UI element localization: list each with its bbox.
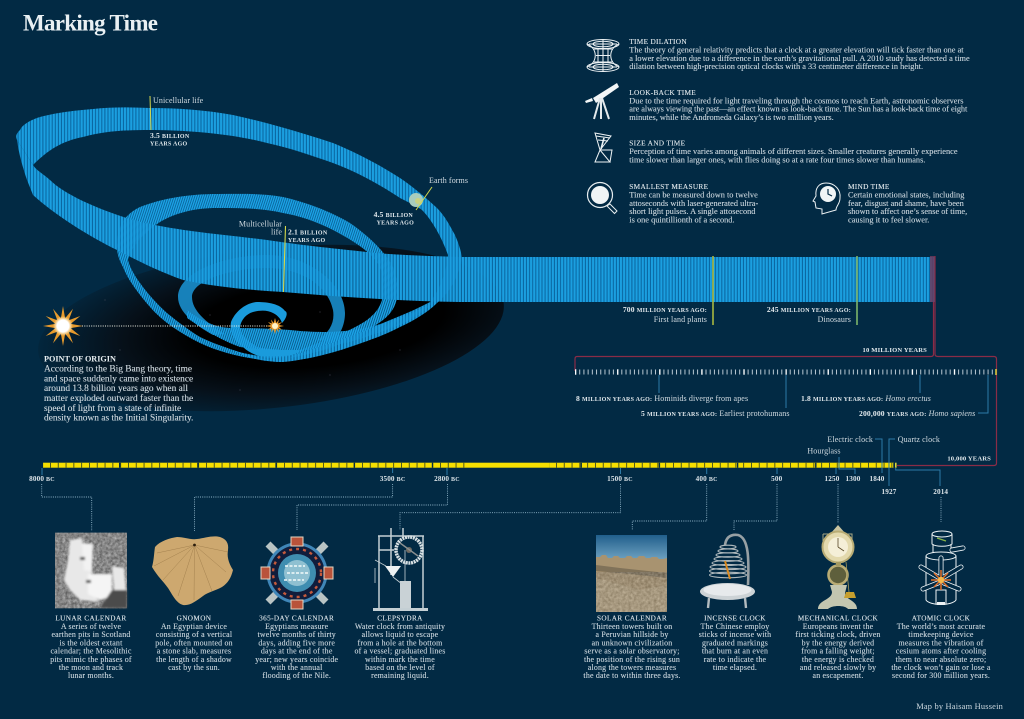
- text block: size and time: time slower than larger ones, with flies doing so at a rate four times slower than humans.: [629, 155, 925, 164]
- text: mechanical clock: and released slowly by: [800, 663, 876, 672]
- text block: mind time: Certain emotional states, including: [848, 191, 964, 200]
- text: atomic clock: ATOMIC CLOCK: [912, 615, 971, 623]
- icon: small origin burst: [266, 318, 284, 334]
- picture: clepsydra: [373, 528, 428, 611]
- marker: multicellular life: life: [271, 228, 282, 236]
- text: gnomon: [155, 615, 233, 672]
- date labels: 1300: [846, 475, 861, 483]
- text: gnomon: consisting of a vertical: [156, 630, 233, 639]
- clock labels above the bar: Electric clock: [827, 435, 873, 444]
- text: mechanical clock: Europeans invent the: [803, 622, 874, 631]
- text block: smallest measure: attoseconds with laser-generated ultra-: [629, 199, 758, 208]
- text block: point of origin: speed of light from a state of infinite: [44, 403, 181, 414]
- bracket: 10 million years zoom: [575, 256, 996, 466]
- text: lunar calendar: lunar months.: [68, 671, 114, 680]
- text: mechanical clock: [795, 615, 881, 680]
- text block: smallest measure: is one quintillionth of a second.: [629, 215, 735, 224]
- text: incense clock: sticks of incense with: [699, 630, 771, 639]
- text: lunar calendar: pits mimic the phases of: [50, 655, 132, 664]
- label: earliest protohumans: 5 MILLION YEARS AGO: Earliest protohumans: [641, 409, 790, 418]
- marker: unicellular life: YEARS AGO: [150, 142, 188, 148]
- date labels: 500: [771, 475, 783, 483]
- text block: mind time: causing it to feel slower.: [848, 215, 929, 224]
- marker: dinosaurs: 245 MILLION YEARS AGO:: [767, 305, 851, 314]
- text: solar calendar: SOLAR CALENDAR: [597, 615, 667, 623]
- date labels: 2800 BC: [434, 475, 460, 483]
- marker: unicellular life: [150, 96, 204, 148]
- text: atomic clock: [891, 615, 991, 680]
- icon: size and time: [595, 133, 612, 162]
- icon: magnifying glass: [588, 182, 617, 214]
- marker: unicellular life: Unicellular life: [153, 96, 204, 105]
- text: atomic clock: The world’s most accurate: [897, 622, 986, 631]
- picture: incense clock: [700, 535, 755, 608]
- text: lunar calendar: the moon and track: [59, 663, 123, 672]
- text: gnomon: pole, often mounted on: [155, 638, 233, 647]
- text: clepsydra: [354, 615, 446, 680]
- icon: time dilation: [587, 39, 619, 72]
- text block: mind time: [848, 182, 967, 224]
- text block: look-back time: minutes, while the Andromeda Galaxy’s is two million years.: [629, 113, 834, 122]
- label: hominids diverge from apes: 8 MILLION YEARS AGO: Hominids diverge from apes: [576, 394, 748, 403]
- text: atomic clock: the clock won’t gain or lose a: [891, 663, 991, 672]
- date labels: 1250: [825, 475, 840, 483]
- marker: multicellular life: 2.1 BILLION: [288, 228, 328, 236]
- text: lunar calendar: calendar; the Mesolithic: [50, 647, 132, 656]
- yellow 10,000-year timeline bar: [43, 463, 897, 468]
- text: clepsydra: Water clock from antiquity: [355, 622, 445, 631]
- spiral timeline: lower sweep: [187, 302, 433, 350]
- text block: mind time: shown to affect one’s sense of time,: [848, 207, 967, 216]
- date labels: 2014: [933, 488, 948, 496]
- text: clepsydra: remaining liquid.: [371, 671, 429, 680]
- icon: head with clock: [813, 183, 840, 214]
- text: clepsydra: from a hole at the bottom: [358, 638, 443, 647]
- text: mechanical clock: MECHANICAL CLOCK: [798, 615, 879, 623]
- marker: multicellular life: Multicellular: [239, 220, 282, 228]
- spiral timeline: third loop: [178, 255, 345, 342]
- text block: mind time: fear, disgust and shame, have been: [848, 199, 965, 208]
- label: homo erectus: [801, 375, 931, 403]
- picture: 365-day calendar: [261, 537, 333, 609]
- date labels: 3500 BC: [380, 475, 405, 483]
- date labels: 8000 BC: [29, 475, 55, 483]
- text: 365-day calendar: 365-DAY CALENDAR: [259, 615, 334, 623]
- text: incense clock: graduated markings: [702, 638, 768, 647]
- text block: look-back time: [629, 88, 968, 122]
- text: solar calendar: the date to within three days.: [583, 671, 681, 680]
- text: lunar calendar: earthen pits in Scotland: [51, 630, 131, 639]
- picture: mechanical clock: [818, 525, 857, 609]
- date labels: 1927: [882, 488, 897, 496]
- text: lunar calendar: is the oldest extant: [60, 638, 123, 647]
- text: incense clock: time elapsed.: [713, 663, 757, 672]
- title: Marking Time: [23, 10, 158, 36]
- text: solar calendar: an unknown civilization: [592, 638, 672, 647]
- marker: earth forms: [374, 176, 468, 226]
- text: 365-day calendar: with the annual: [271, 663, 323, 672]
- marker: earth forms: YEARS AGO: [377, 220, 414, 226]
- text: solar calendar: the position of the rising sun: [584, 655, 680, 664]
- text: atomic clock: timekeeping device: [908, 630, 974, 639]
- marker: first land plants: [623, 256, 713, 325]
- text block: size and time: Perception of time varies among animals of different sizes. Smaller creatures generally experience: [629, 147, 958, 156]
- date labels: [29, 475, 948, 496]
- text block: size and time: [629, 139, 958, 164]
- text: clepsydra: allows liquid to escape: [362, 630, 439, 639]
- bracket: 10 million years zoom: 10 MILLION YEARS: [863, 347, 927, 354]
- dotted line from burst to spiral centre: [82, 325, 272, 327]
- text: clepsydra: of a vessel; graduated lines: [354, 647, 446, 656]
- text: mechanical clock: by the energy derived: [802, 638, 874, 647]
- text block: smallest measure: [629, 182, 758, 224]
- date labels: 1840: [870, 475, 885, 483]
- text: gnomon: cast by the sun.: [168, 663, 220, 672]
- marker: multicellular life: YEARS AGO: [288, 238, 326, 244]
- text: solar calendar: Thirteen towers built on: [592, 622, 672, 631]
- marker: first land plants: 700 MILLION YEARS AGO:: [623, 305, 707, 314]
- marker: multicellular life: [239, 220, 328, 292]
- picture: solar calendar towers: [596, 535, 667, 612]
- text: mechanical clock: from a falling weight;: [801, 647, 875, 656]
- label: homo sapiens: 200,000 YEARS AGO: Homo sapiens: [859, 409, 975, 418]
- marker: first land plants: First land plants: [654, 315, 707, 324]
- text block: look-back time: LOOK-BACK TIME: [629, 88, 696, 97]
- text block: look-back time: are always viewing the past—an effect known as look-back time. The Sun has a look-back time of eight: [629, 105, 968, 114]
- clock labels above the bar: Quartz clock: [898, 435, 940, 444]
- ticks: ten-million-year scale: [575, 369, 996, 375]
- picture: gnomon slab: [152, 536, 233, 605]
- credit: Map by Haisam Hussein: [916, 702, 1004, 711]
- text: incense clock: [699, 615, 771, 672]
- text: gnomon: GNOMON: [177, 615, 212, 623]
- text: clepsydra: based on the level of: [365, 663, 435, 672]
- marker: unicellular life: 3.5 BILLION: [150, 131, 190, 140]
- text: solar calendar: serve as a solar observatory;: [584, 647, 680, 656]
- text block: time dilation: The theory of general relativity predicts that a clock at a greater elevation will tick faster than one at: [629, 46, 964, 54]
- text block: smallest measure: short light pulses. A single attosecond: [629, 207, 756, 216]
- text block: point of origin: [44, 354, 193, 424]
- text block: point of origin: matter exploded outward faster than the: [44, 393, 193, 404]
- text: lunar calendar: LUNAR CALENDAR: [55, 615, 127, 623]
- text: mechanical clock: an escapement.: [812, 671, 864, 680]
- text block: point of origin: density known as the Initial Singularity.: [44, 414, 193, 424]
- text: 365-day calendar: twelve months of thirty: [257, 630, 336, 639]
- text block: time dilation: dilation between high-precision optical clocks with a 33 centimeter difference in height.: [629, 62, 923, 71]
- text block: point of origin: around 13.8 billion years ago when all: [44, 384, 188, 394]
- text block: time dilation: TIME DILATION: [629, 37, 687, 46]
- text: solar calendar: a Peruvian hillside by: [596, 630, 668, 639]
- icon: big bang burst: [43, 306, 83, 346]
- text: clepsydra: within mark the time: [365, 655, 435, 664]
- text: clepsydra: CLEPSYDRA: [377, 615, 423, 623]
- marker: earth forms: Earth forms: [429, 176, 468, 185]
- text: atomic clock: cesium atoms after cooling: [896, 647, 986, 656]
- spiral timeline: inner curl: [231, 302, 305, 358]
- clock labels above the bar: Hourglass: [807, 446, 841, 456]
- icon: telescope: [585, 83, 619, 119]
- text block: time dilation: [629, 37, 970, 71]
- text: 365-day calendar: days at the end of the: [261, 647, 333, 656]
- text: lunar calendar: [50, 615, 132, 680]
- text: incense clock: The Chinese employ: [701, 622, 769, 631]
- spiral timeline: second loop: [117, 194, 397, 362]
- marker: dinosaurs: Dinosaurs: [818, 315, 851, 324]
- clock labels above the bar: [807, 435, 940, 456]
- date labels: 1500 BC: [607, 475, 633, 483]
- text: 365-day calendar: flooding of the Nile.: [262, 671, 331, 680]
- text block: time dilation: a lower elevation due to a difference in the earth’s gravitational pull. A 2010 study has detected a time: [629, 54, 970, 63]
- text block: point of origin: and space suddenly came into existence: [44, 374, 193, 384]
- text: atomic clock: second for 300 million years.: [892, 671, 990, 680]
- spiral timeline: straight band: [17, 140, 935, 302]
- bracket: 10 million years zoom: 10,000 YEARS: [947, 456, 991, 462]
- label: homo erectus: 1.8 MILLION YEARS AGO: Homo erectus: [801, 394, 931, 403]
- text: atomic clock: them to near absolute zero;: [896, 655, 986, 664]
- text: 365-day calendar: days, adding five more: [258, 638, 335, 647]
- text: gnomon: the length of a shadow: [156, 655, 232, 664]
- text: atomic clock: measures the vibration of: [899, 638, 984, 647]
- marker: earth forms: 4.5 BILLION: [374, 210, 413, 219]
- picture: atomic clock: [921, 531, 963, 605]
- dark ellipse of space behind the spiral: [30, 224, 512, 432]
- picture: lunar calendar pits: [55, 533, 127, 608]
- text block: smallest measure: Time can be measured down to twelve: [629, 191, 758, 200]
- text block: look-back time: Due to the time required for light traveling through the cosmos to reach Earth, astronomic observers: [629, 96, 964, 105]
- text block: point of origin: POINT OF ORIGIN: [44, 354, 116, 364]
- text: mechanical clock: the energy is checked: [802, 655, 874, 664]
- text: mechanical clock: first ticking clock, driven: [795, 630, 881, 639]
- text block: point of origin: According to the Big Bang theory, time: [44, 364, 192, 374]
- text: 365-day calendar: year; new years coincide: [255, 655, 338, 664]
- text: incense clock: INCENSE CLOCK: [704, 615, 766, 623]
- text: 365-day calendar: Egyptians measure: [265, 622, 329, 631]
- timeline leader lines: [42, 439, 941, 531]
- text block: size and time: SIZE AND TIME: [629, 139, 686, 148]
- date labels: 400 BC: [696, 475, 718, 483]
- text: incense clock: rate to indicate the: [704, 655, 767, 664]
- text: gnomon: An Egyptian device: [161, 622, 227, 631]
- spiral timeline: outer loop: [16, 107, 462, 362]
- marker: dinosaurs: [767, 256, 857, 325]
- text: 365-day calendar: [255, 615, 338, 680]
- text: lunar calendar: A series of twelve: [61, 622, 121, 631]
- label: homo sapiens: [859, 375, 988, 418]
- text block: smallest measure: SMALLEST MEASURE: [629, 182, 709, 191]
- text: solar calendar: [583, 615, 681, 680]
- text: solar calendar: along the towers measures: [588, 663, 676, 672]
- text: incense clock: that burn at an even: [702, 647, 768, 656]
- text block: mind time: MIND TIME: [848, 182, 890, 191]
- text: gnomon: a stone slab, measures: [157, 647, 231, 656]
